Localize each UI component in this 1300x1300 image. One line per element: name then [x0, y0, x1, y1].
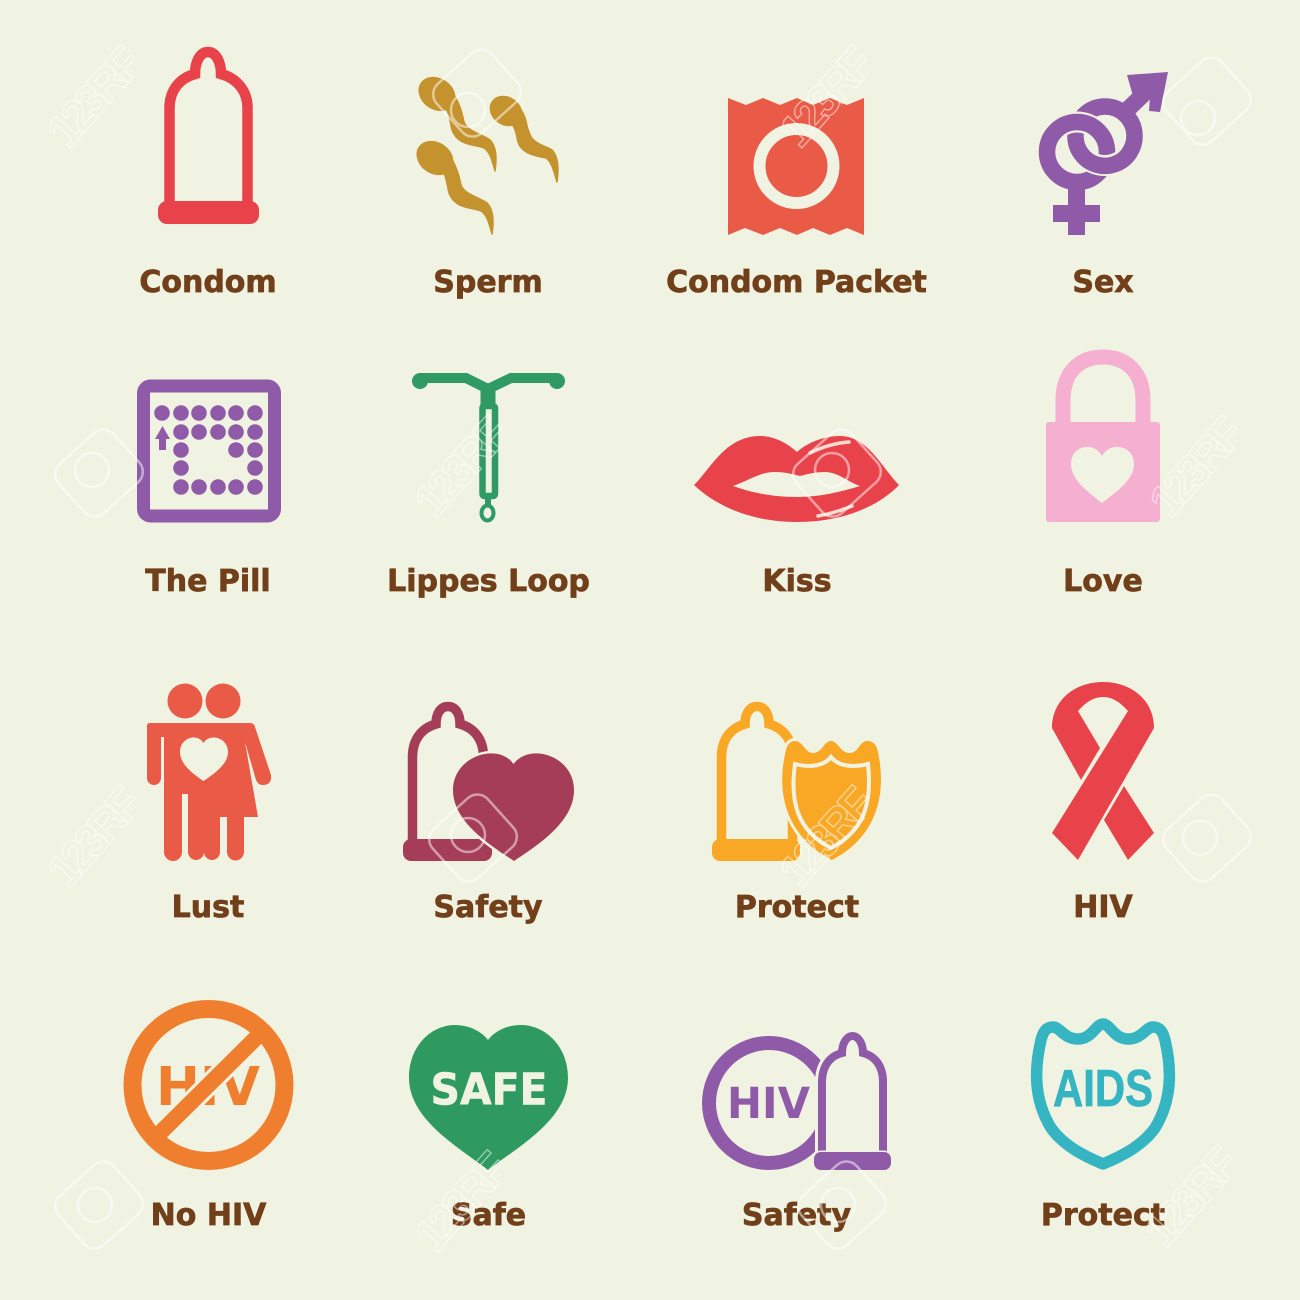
watermarks: 123RF [769, 776, 884, 897]
watermarks: 123RF [769, 36, 884, 157]
watermarks: 123RF [404, 1141, 519, 1262]
label: sperm: Sperm [433, 265, 543, 300]
icon: sex symbols [1047, 72, 1168, 235]
icon: lust couple [147, 684, 271, 861]
icon: protect condom and shield [712, 706, 881, 861]
icon: lippes loop [412, 373, 565, 520]
label: safe: Safe [451, 1198, 526, 1233]
label: condom: Condom [139, 265, 277, 300]
watermarks: 123RF [37, 776, 152, 897]
watermarks: 123RF [1134, 1136, 1249, 1257]
label: safety: Safety [433, 890, 543, 925]
icon: no HIV sign [132, 1009, 284, 1161]
label: the pill: The Pill [145, 564, 271, 599]
label: HIV: HIV [1073, 890, 1134, 925]
label: lippes loop: Lippes Loop [387, 564, 590, 599]
icon: sperm [411, 71, 558, 234]
label: no HIV: No HIV [151, 1198, 267, 1233]
icon: safety HIV circle and condom: HIV [727, 1080, 810, 1129]
watermarks: 123RF [1139, 406, 1254, 527]
icon: love padlock [1046, 357, 1160, 522]
label: safety: Safety [742, 1198, 852, 1233]
label: protect: Protect [735, 890, 859, 925]
icon: AIDS shield [1037, 1024, 1169, 1164]
icon: no HIV sign: HIV [156, 1055, 261, 1118]
icon: safe heart [409, 1025, 568, 1170]
icon: safe heart: SAFE [430, 1064, 548, 1116]
label: love: Love [1063, 564, 1143, 599]
watermarks: 123RF [404, 406, 519, 527]
icon: safety condom and heart [403, 706, 574, 861]
label: lust: Lust [172, 890, 244, 925]
icon: condom packet [728, 98, 864, 235]
icon: the pill [144, 386, 274, 516]
label: protect: Protect [1041, 1198, 1165, 1233]
label: sex: Sex [1072, 265, 1134, 300]
icon: HIV ribbon [1052, 682, 1154, 860]
label: condom packet: Condom Packet [666, 265, 927, 300]
icon: safety HIV circle and condom [709, 1036, 891, 1170]
icon: kiss lips [694, 436, 899, 522]
icon: condom [158, 52, 259, 224]
label: kiss: Kiss [762, 564, 832, 599]
icon: AIDS shield: AIDS [1053, 1060, 1153, 1118]
watermarks: 123RF [37, 36, 152, 157]
